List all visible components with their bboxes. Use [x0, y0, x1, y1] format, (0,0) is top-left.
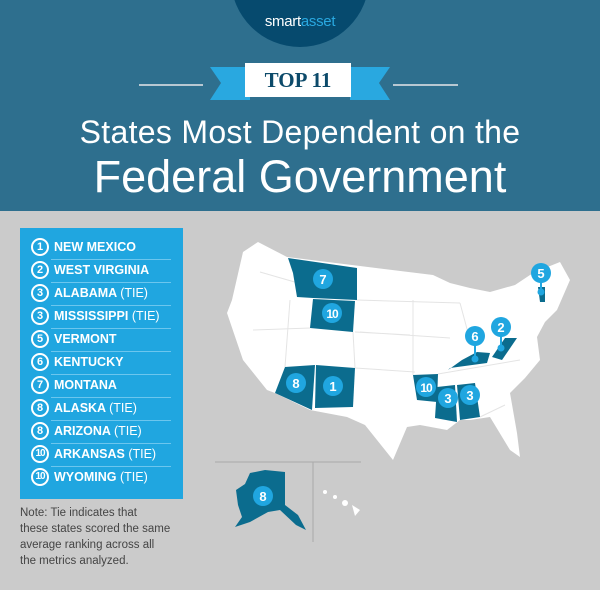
- row 8: [31, 399, 171, 421]
- row 2: WEST VIRGINIA: [54, 263, 149, 277]
- row 4: MISSISSIPPI (TIE): [54, 309, 160, 323]
- markers: 6: [471, 329, 479, 344]
- row 6: KENTUCKY: [54, 355, 123, 369]
- markers: 10: [420, 381, 433, 395]
- title: Federal Government: [94, 151, 506, 202]
- row 5: 5: [37, 333, 43, 345]
- markers: 5: [537, 266, 545, 281]
- row 6: 6: [37, 356, 43, 368]
- state: Arizona: [275, 365, 315, 410]
- note: the metrics analyzed.: [20, 555, 129, 567]
- markers: 3: [444, 391, 452, 406]
- markers: 10: [326, 307, 339, 321]
- markers: 3: [466, 388, 474, 403]
- row 7: 7: [37, 379, 43, 391]
- logo tab: [231, 0, 369, 47]
- state: Alabama: [457, 383, 480, 420]
- row 3: ALABAMA (TIE): [54, 286, 148, 300]
- row 1: [31, 238, 171, 260]
- markers: 8: [292, 376, 300, 391]
- state: New Mexico: [315, 365, 355, 408]
- row 7: [31, 376, 171, 398]
- row 4: 3: [37, 310, 43, 322]
- ribbon: [210, 67, 390, 100]
- note: average ranking across all: [20, 539, 154, 551]
- markers: 1: [329, 379, 337, 394]
- title: [80, 114, 520, 202]
- row 2: [31, 261, 171, 283]
- Alaska: [235, 470, 306, 530]
- row 1: 1: [37, 241, 43, 253]
- row 2: 2: [37, 264, 43, 276]
- row 5: VERMONT: [54, 332, 116, 346]
- state: Wyoming: [310, 299, 355, 332]
- row 6: [31, 353, 171, 375]
- row 8: ALASKA (TIE): [54, 401, 137, 415]
- row 10: 10: [35, 448, 45, 459]
- row 3: [31, 284, 171, 306]
- Hawaii: [323, 490, 360, 516]
- markers: 2: [497, 320, 505, 335]
- row 11: [31, 468, 148, 486]
- row 9: 8: [37, 425, 43, 437]
- state: Vermont: [538, 287, 545, 302]
- row 7: MONTANA: [54, 378, 117, 392]
- US outline: [227, 242, 570, 460]
- markers: 7: [319, 272, 327, 287]
- decorative lines: [139, 84, 203, 86]
- row 9: [31, 422, 171, 444]
- row 8: 8: [37, 402, 43, 414]
- logo text: smartasset: [265, 13, 335, 30]
- note: Note: Tie indicates that: [20, 507, 137, 519]
- row 5: [31, 330, 171, 352]
- row 3: 3: [37, 287, 43, 299]
- state: West Virginia: [492, 338, 517, 360]
- state: Arkansas: [413, 374, 438, 402]
- markers: [253, 263, 551, 506]
- state: Kentucky: [448, 352, 490, 370]
- title: States Most Dependent on the: [80, 114, 520, 150]
- state: Mississippi: [435, 385, 457, 422]
- row 9: ARIZONA (TIE): [54, 424, 142, 438]
- ranking list panel: [20, 228, 183, 499]
- TOP 11 badge: TOP 11: [265, 68, 331, 92]
- note: these states scored the same: [20, 523, 170, 535]
- row 11: WYOMING (TIE): [54, 470, 148, 484]
- markers: 8: [259, 489, 267, 504]
- state: Montana: [288, 258, 357, 300]
- row 10: [31, 445, 171, 467]
- header: [0, 0, 600, 211]
- row 11: 10: [35, 471, 45, 482]
- row 10: ARKANSAS (TIE): [54, 447, 156, 461]
- row 4: [31, 307, 171, 329]
- TOP 11 badge: [245, 63, 351, 97]
- row 1: NEW MEXICO: [54, 240, 136, 254]
- note: [20, 507, 170, 567]
